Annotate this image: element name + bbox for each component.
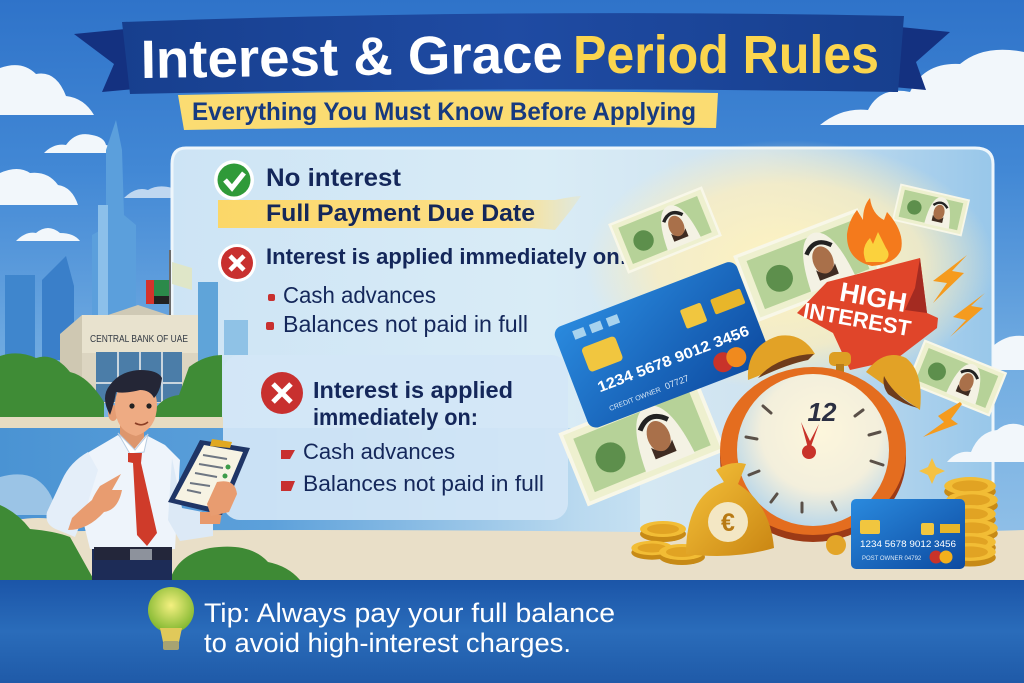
building: Central Bank of UAE: [60, 305, 198, 403]
list 2: Cash advances: [303, 439, 455, 464]
hair: [105, 370, 162, 415]
building: Central Bank of UAE: CENTRAL BANK OF UAE: [90, 333, 188, 345]
arrow: high interest: INTEREST: [801, 298, 913, 341]
icon: lightbulb: [148, 587, 194, 650]
heading: interest applied 1: Interest is applied immediately on:: [266, 244, 627, 269]
holding hand: [207, 481, 237, 516]
tie: [128, 453, 157, 546]
highlight text: Full Payment Due Date: [266, 200, 535, 227]
left sleeve: [46, 452, 98, 537]
credit card small: [851, 499, 965, 569]
credit card large: [552, 259, 773, 430]
icon: red cross 1: [218, 244, 256, 282]
heading: no interest: No interest: [266, 164, 402, 192]
face features: [129, 403, 152, 425]
tip text: Tip: Always pay your full balance: [204, 598, 615, 628]
clock bells: [748, 335, 921, 410]
icon: flame: [847, 198, 902, 266]
icons: lightning bolts: [923, 255, 985, 437]
shirt: [78, 435, 180, 549]
credit card small: POST OWNER 04792: [862, 556, 922, 562]
neck: [120, 425, 144, 457]
belt: [94, 547, 172, 560]
list 1: Balances not paid in full: [283, 311, 528, 337]
credit card large: CREDIT OWNER: [608, 387, 662, 413]
list 2: Balances not paid in full: [303, 471, 544, 496]
clipboard: [168, 439, 250, 515]
heading: interest applied 2: immediately on:: [313, 404, 478, 430]
collar: [118, 433, 148, 454]
icon: green check: [214, 160, 254, 200]
clouds: [0, 50, 1024, 241]
credit card large: 07727: [663, 373, 690, 391]
header ribbon: [74, 13, 950, 94]
title: Interest & Grace: [140, 24, 563, 90]
promenade: [0, 417, 223, 428]
panel: second rules card: [223, 355, 568, 520]
heading: interest applied 2: Interest is applied: [313, 377, 513, 403]
alarm clock: [720, 335, 921, 542]
beach: [0, 530, 1024, 580]
flame core: [864, 232, 889, 262]
coin stack right: [944, 477, 998, 567]
bottom band: [0, 580, 1024, 683]
icon: red cross 2: [261, 372, 303, 414]
explosion glow: [585, 140, 995, 390]
list 2: [281, 439, 544, 496]
arrow: high interest: [797, 258, 938, 370]
sea: [0, 428, 640, 533]
foreground shrubs: [0, 505, 300, 580]
trees: [0, 353, 222, 417]
head: [108, 405, 118, 421]
credit card small: 1234 5678 9012 3456: [860, 539, 956, 550]
list 1: Cash advances: [283, 282, 436, 308]
right forearm: [200, 512, 222, 524]
arrow: high interest: HIGH: [837, 277, 909, 318]
money bag: [686, 463, 774, 556]
trousers: [92, 548, 172, 580]
list 1: [266, 282, 528, 337]
person presenter: [46, 370, 250, 580]
clock number: 12: [808, 397, 837, 427]
flags: [146, 250, 192, 318]
highlight ribbon: [218, 196, 581, 230]
title accent: Period Rules: [573, 25, 879, 85]
subtitle ribbon: [178, 91, 718, 130]
city skyline: [5, 120, 248, 367]
money bag: €: [721, 509, 735, 537]
credit card large: 1234 5678 9012 3456: [595, 323, 752, 396]
tip text: to avoid high-interest charges.: [204, 628, 571, 658]
right sleeve: [168, 458, 213, 541]
pointing hand: [68, 474, 122, 530]
subtitle: Everything You Must Know Before Applying: [192, 98, 696, 126]
rock: [0, 474, 56, 515]
bank notes: [561, 185, 1006, 504]
small coin: [826, 535, 846, 555]
panel: main rules card: [172, 148, 993, 533]
coins left: [631, 521, 705, 565]
right clouds over panel edge: [947, 336, 1024, 462]
icon: sparkle: [919, 458, 945, 484]
